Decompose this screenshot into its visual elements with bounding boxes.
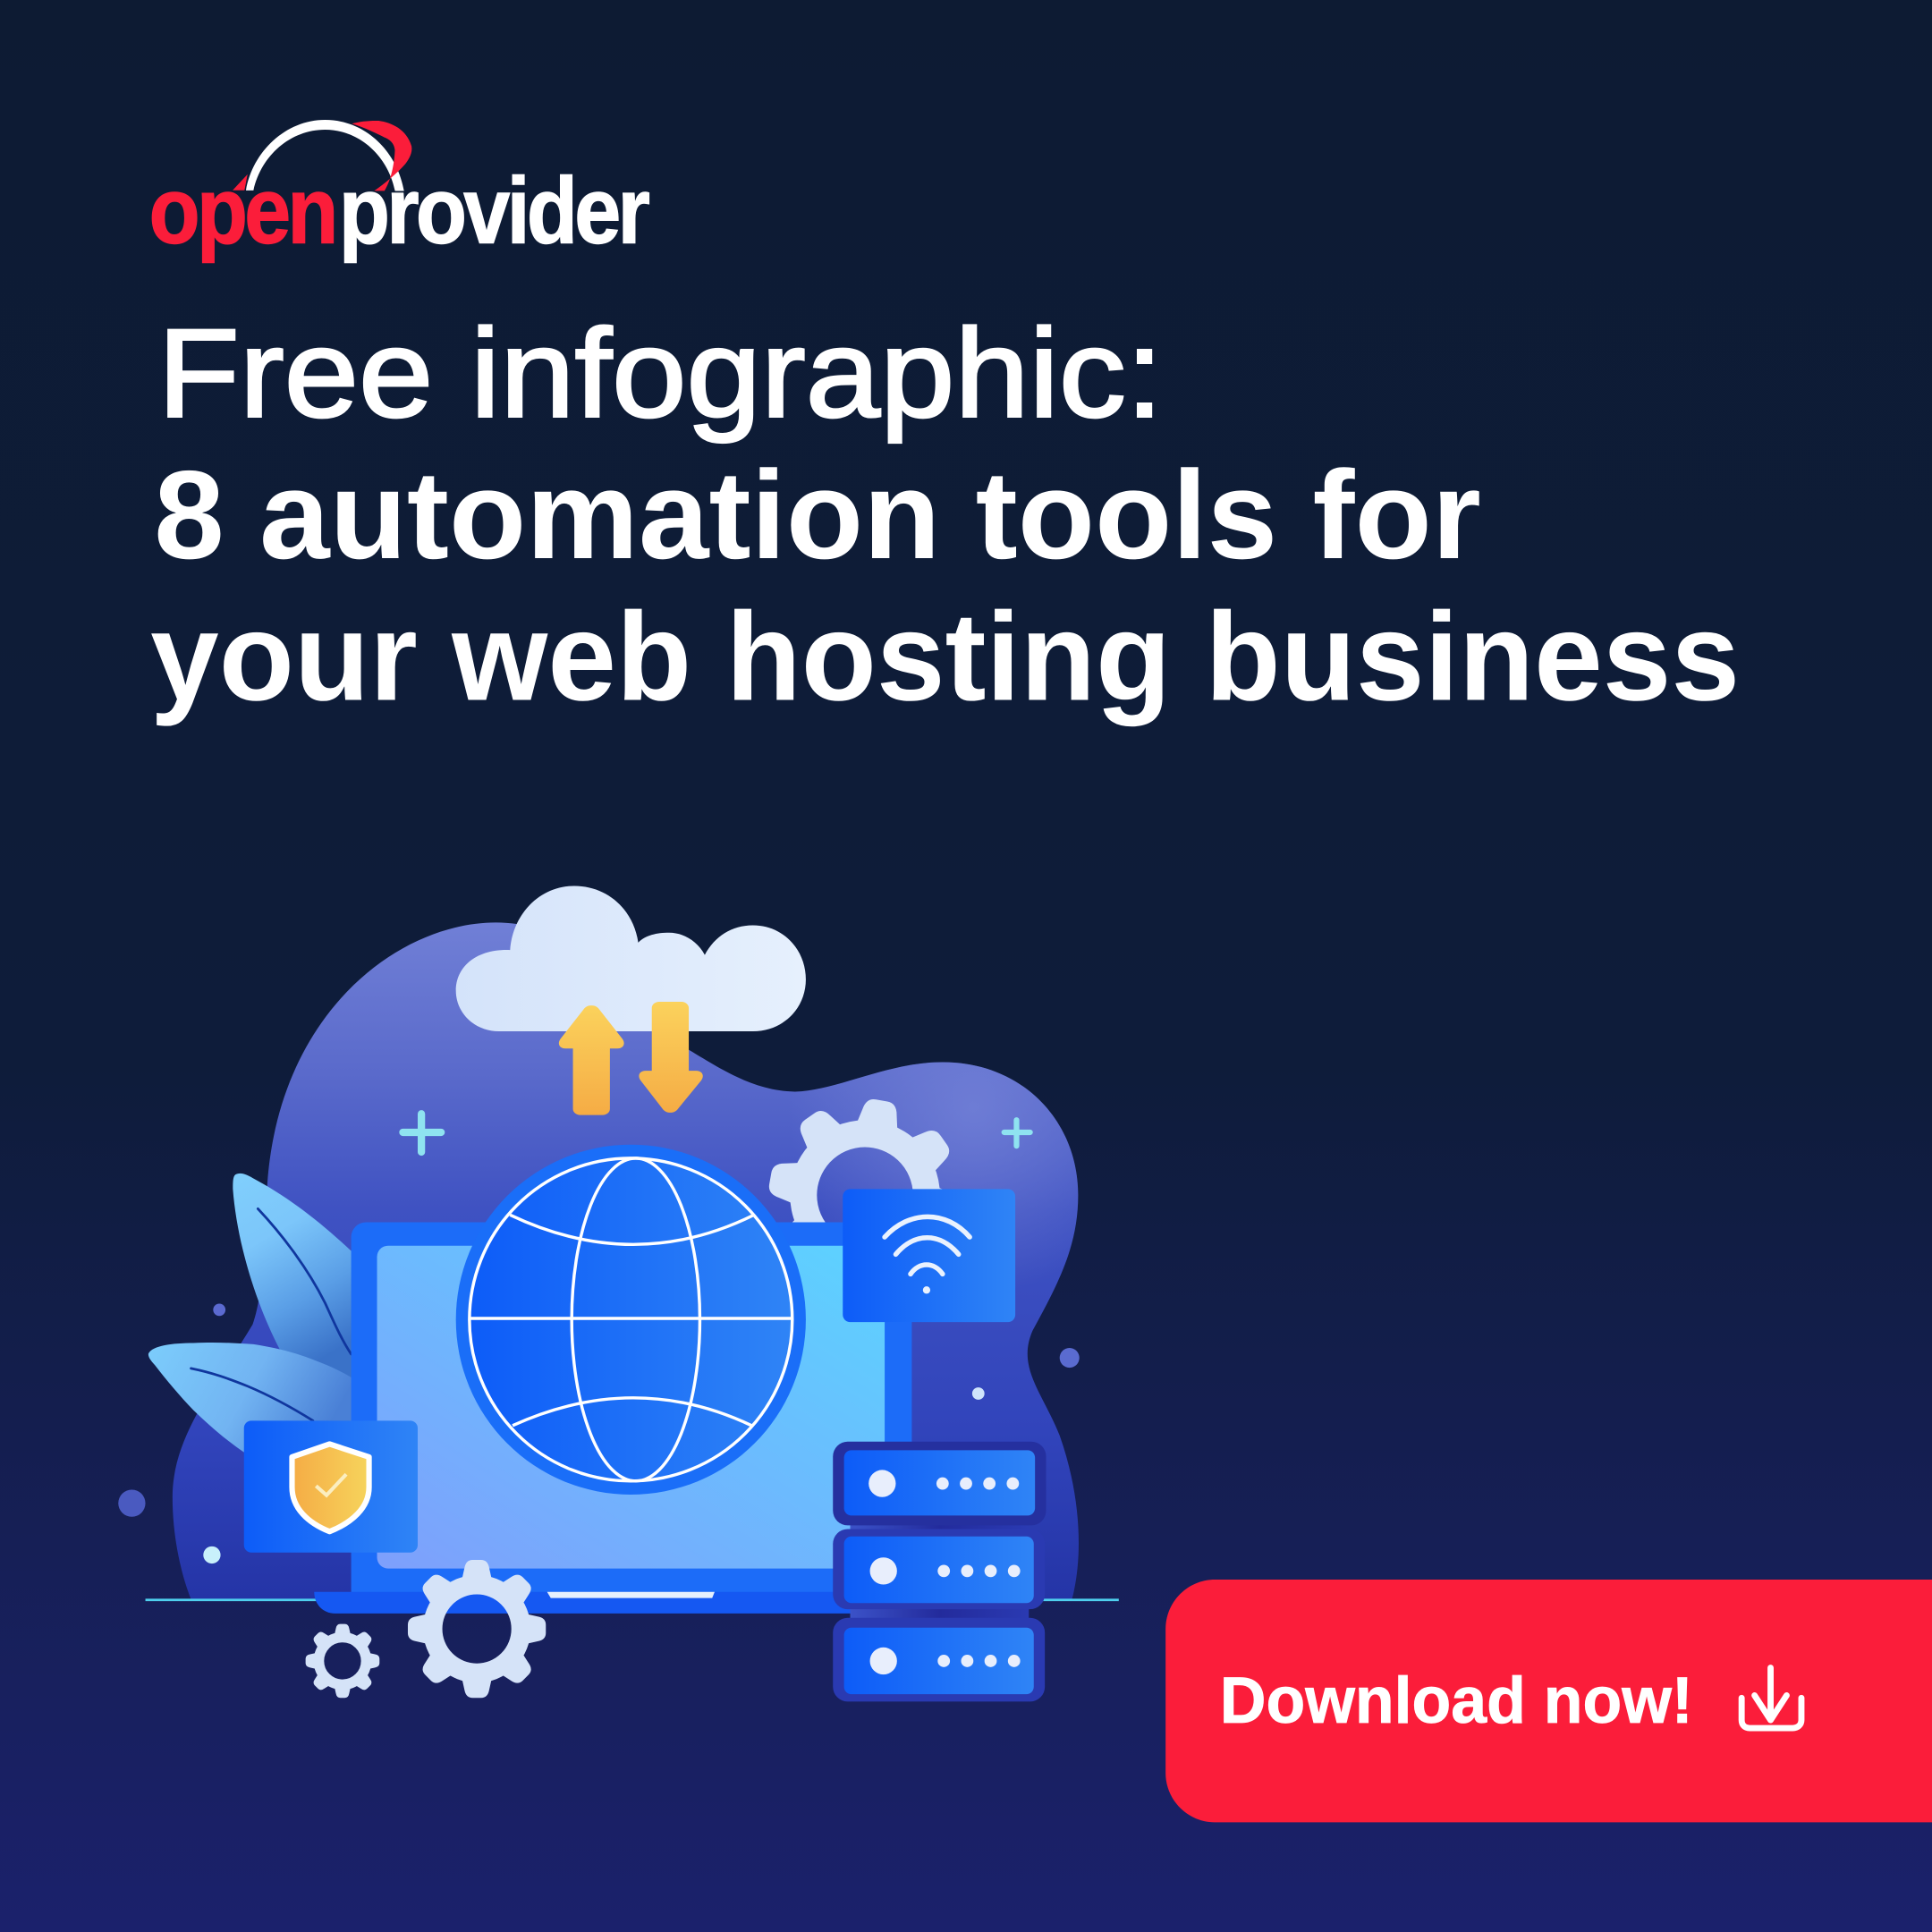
decorative dots bbox=[118, 1303, 1080, 1563]
wifi card bbox=[843, 1189, 1015, 1322]
illustration: web hosting bbox=[118, 886, 1119, 1701]
gear small bbox=[306, 1624, 379, 1698]
title: 8 automation tools for bbox=[154, 445, 1481, 585]
icon: plus left bbox=[402, 1114, 441, 1152]
logo: openprovider: provider bbox=[339, 158, 649, 263]
gear large bbox=[408, 1560, 546, 1698]
ground line bbox=[146, 1599, 1119, 1601]
logo: openprovider bbox=[149, 120, 649, 263]
title: Free infographic: bbox=[157, 303, 1163, 444]
globe bbox=[456, 1145, 806, 1495]
arrow up bbox=[559, 1005, 624, 1115]
laptop bbox=[314, 1223, 911, 1614]
logo: openprovider: open bbox=[149, 158, 335, 263]
button label: Download now! bbox=[1220, 1665, 1693, 1737]
leaf upper bbox=[233, 1174, 357, 1386]
server stack bbox=[833, 1442, 1046, 1701]
icon: plus right bbox=[1004, 1120, 1030, 1146]
gear behind laptop bbox=[754, 1084, 977, 1307]
cloud bbox=[456, 886, 806, 1031]
title bbox=[150, 303, 1740, 726]
download button bbox=[1165, 1580, 1932, 1822]
shield card bbox=[244, 1420, 418, 1553]
icon: download bbox=[1741, 1668, 1801, 1728]
background blob bbox=[173, 922, 1079, 1599]
leaf lower bbox=[148, 1343, 357, 1454]
arrow down bbox=[639, 1002, 703, 1113]
title: your web hosting business bbox=[150, 586, 1740, 726]
